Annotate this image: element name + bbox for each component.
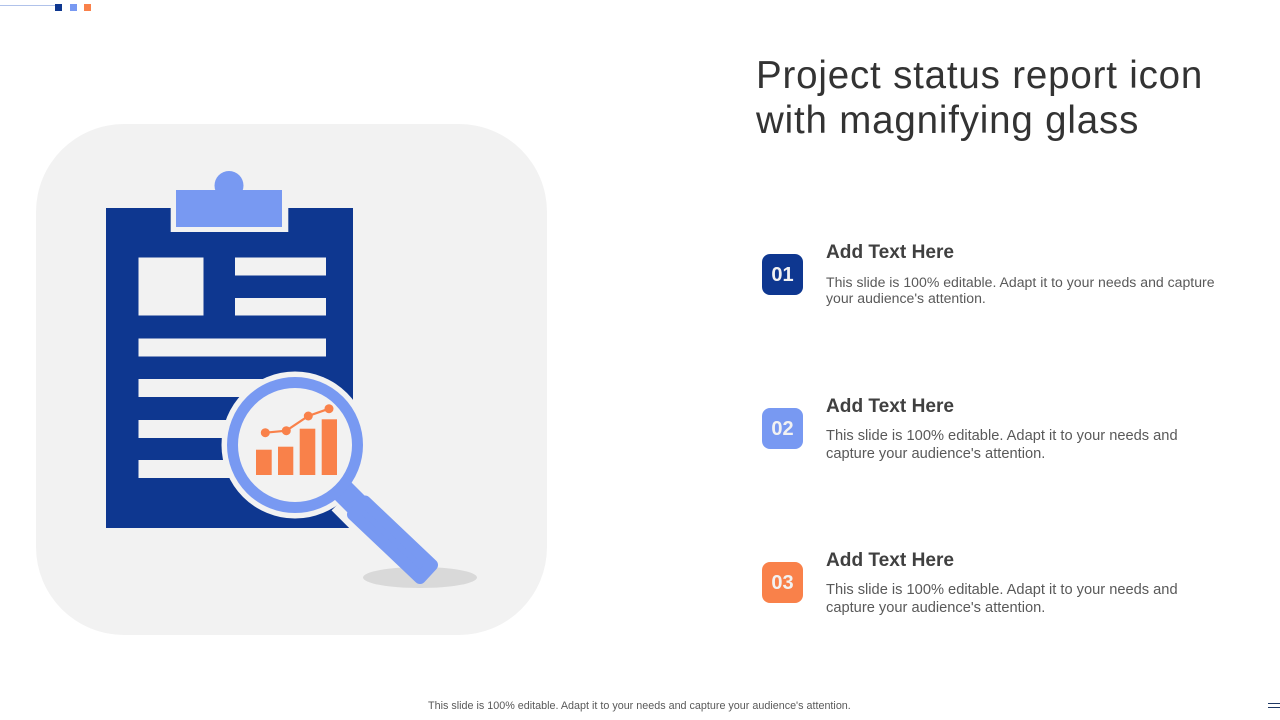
title: [756, 54, 1203, 142]
item 01 text: your audience's attention.: [826, 290, 986, 306]
badge 03: [762, 562, 803, 603]
item 01 heading: Add Text Here: [826, 242, 954, 263]
badge 02: 02: [771, 418, 794, 440]
item 02 heading: Add Text Here: [826, 396, 954, 417]
badge 01: 01: [771, 264, 794, 286]
item 01 text: [826, 274, 1215, 306]
shadow under magnifying glass: [363, 567, 477, 588]
item 02 text: This slide is 100% editable. Adapt it to your needs and: [826, 428, 1178, 444]
item 03 text: [826, 582, 1178, 616]
item 02 text: [826, 428, 1178, 462]
badge 03: 03: [771, 572, 794, 594]
panel background: [36, 124, 547, 635]
icon: bar chart with trend line: [256, 404, 337, 475]
icon: clipboard: [106, 171, 353, 528]
badge 02: [762, 408, 803, 449]
item 03 text: This slide is 100% editable. Adapt it to your needs and: [826, 582, 1178, 598]
item 02 text: capture your audience's attention.: [826, 446, 1045, 462]
item 01: [762, 242, 1215, 306]
footer note: This slide is 100% editable. Adapt it to your needs and capture your audience's attention.: [428, 700, 851, 712]
icon: magnifying glass: [222, 372, 432, 578]
item 01 text: This slide is 100% editable. Adapt it to your needs and capture: [826, 274, 1215, 290]
title: with magnifying glass: [756, 99, 1139, 142]
item 03: [762, 550, 1178, 616]
item 03 heading: Add Text Here: [826, 550, 954, 571]
top-left decoration: line and three squares: [0, 4, 91, 11]
item 02: [762, 396, 1178, 462]
menu icon bottom right: [1268, 703, 1280, 708]
illustration panel: clipboard and magnifying glass: [36, 124, 547, 635]
item 03 text: capture your audience's attention.: [826, 600, 1045, 616]
title: Project status report icon: [756, 54, 1203, 97]
badge 01: [762, 254, 803, 295]
